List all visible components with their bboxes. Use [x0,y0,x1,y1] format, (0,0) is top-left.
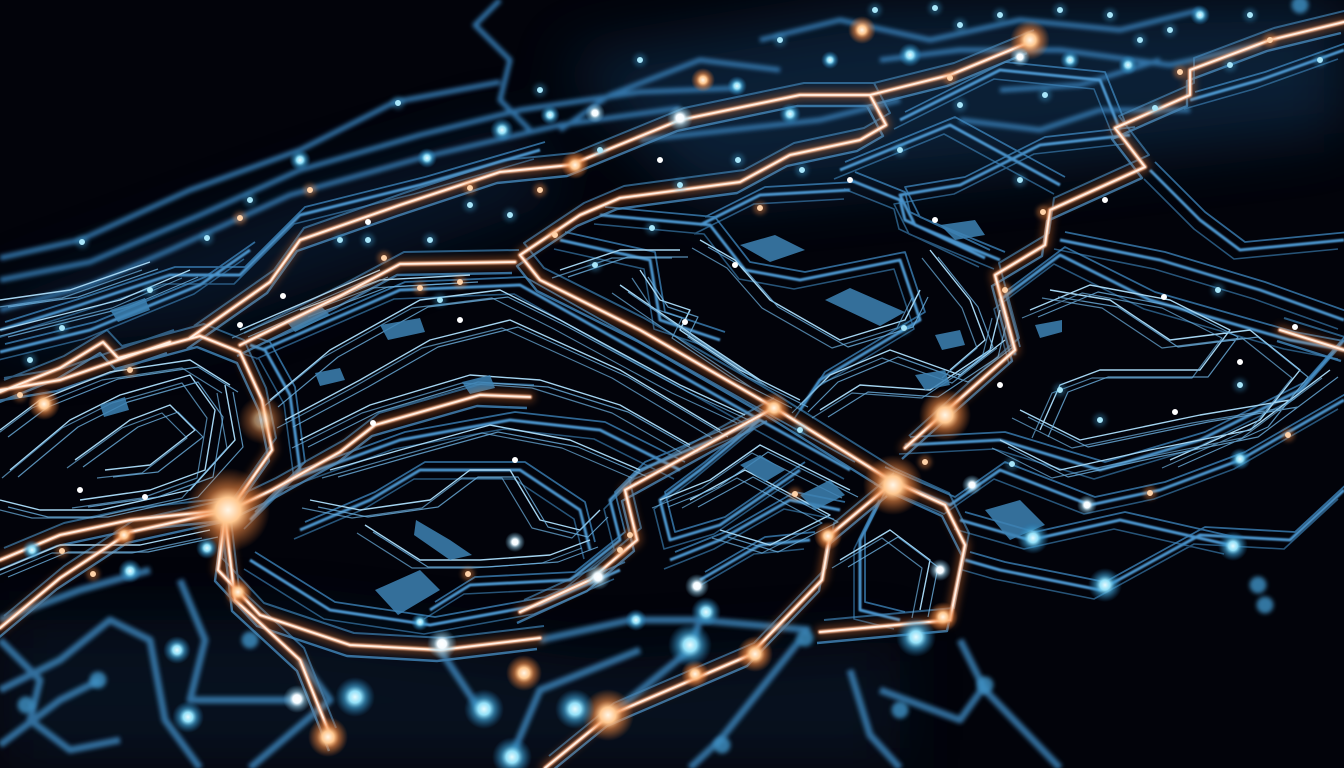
circuit chip pads [100,220,1062,615]
large white nodes [283,47,1097,713]
mid-field blue traces [0,42,1344,634]
small orange nodes [20,40,1288,574]
fine circuit lines [0,240,1338,618]
bottom out-of-focus traces [0,570,1060,768]
small blue nodes [30,8,1320,464]
large orange hot spots [28,16,1050,757]
small white nodes [80,160,1295,497]
upper out-of-focus strands [0,0,1260,310]
